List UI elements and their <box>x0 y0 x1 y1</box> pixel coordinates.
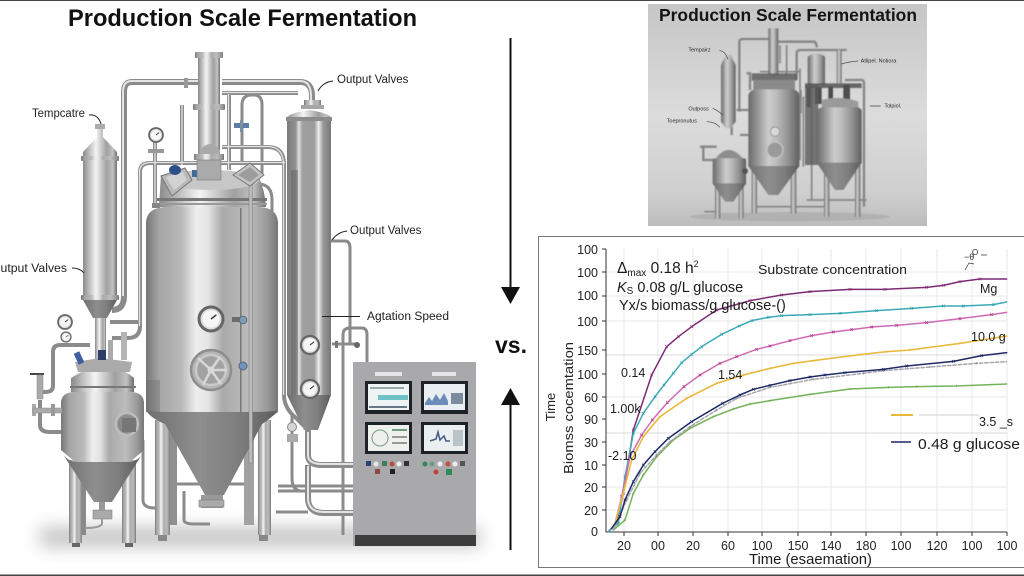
mini labels: Toepronutus <box>667 118 697 124</box>
x axis numbers <box>617 539 1017 553</box>
y axis numbers: 100 <box>577 243 598 257</box>
x axis numbers: 100 <box>891 539 911 553</box>
legend: yellow series: 3.5 _s <box>979 415 1013 429</box>
control buttons <box>366 461 465 475</box>
curve value labels: 1.00k <box>610 402 641 416</box>
mini leader lines <box>707 51 881 127</box>
curve value labels <box>608 282 1006 463</box>
small side fermenter <box>61 332 144 547</box>
axis titles: Time <box>543 393 558 421</box>
label: Agitation Speed: Agtation Speed <box>367 311 449 323</box>
axis titles: Time (esaemation) <box>749 552 872 568</box>
x axis numbers: 100 <box>962 539 982 553</box>
screen 4 <box>421 422 468 454</box>
mini main tank <box>748 80 799 213</box>
axis titles <box>543 342 872 568</box>
arrow: pointing down <box>501 38 520 304</box>
legend: navy series: 0.48 g glucose <box>918 436 1020 453</box>
mini center column <box>768 28 778 75</box>
mini labels: Outposs <box>688 106 709 112</box>
right column gauges <box>301 336 319 398</box>
y axis numbers: 20 <box>584 481 598 495</box>
y axis numbers <box>577 243 598 539</box>
kinetic parameters text: 0.18 h <box>646 260 694 277</box>
mini valve cluster between tanks <box>752 73 862 107</box>
pipework <box>40 81 367 535</box>
blue valves on main tank <box>232 120 249 370</box>
side gauges and valves on small fermenter <box>30 315 360 442</box>
axes and ticks <box>602 249 1007 536</box>
label: Output Valves, top <box>318 74 409 91</box>
mini left column <box>721 55 736 128</box>
screen 2 <box>421 381 468 414</box>
y axis numbers: 100 <box>577 289 598 303</box>
x axis numbers: 100 <box>752 539 772 553</box>
arrow: pointing up <box>501 388 520 550</box>
manhole wheel on main tank <box>191 350 231 390</box>
panel: biomass growth chart <box>538 236 1024 568</box>
label: Output Valves, middle: Output Valves <box>350 225 422 237</box>
x axis numbers: 150 <box>788 539 808 553</box>
curve: purple <box>608 279 1007 532</box>
kinetic parameters text: K <box>617 280 628 296</box>
x axis numbers: 20 <box>686 539 700 553</box>
kinetic parameters text: 0.08 g/L glucose <box>633 280 743 296</box>
kinetic parameters text: 2 <box>694 259 699 269</box>
x axis numbers: 20 <box>617 539 631 553</box>
x axis numbers: 00 <box>651 539 665 553</box>
kinetic parameters text: max <box>627 268 646 279</box>
mini right tank <box>805 85 862 217</box>
curve: gray dashed <box>613 362 1007 530</box>
label: Tempcatre <box>32 108 101 124</box>
label: Output Valves, top: Output Valves <box>337 74 409 86</box>
top hatches and blue actuators <box>161 160 264 196</box>
curve: green <box>613 384 1007 530</box>
y axis numbers: 100 <box>577 315 598 329</box>
kinetic parameters text: Yx/s biomass/g glucose-() <box>619 298 786 314</box>
curve value labels: 10.0 g <box>971 330 1006 344</box>
y axis numbers: 20 <box>584 504 598 518</box>
heading: substrate concentration: Substrate concentration <box>758 262 907 277</box>
x axis numbers: 120 <box>927 539 947 553</box>
x axis numbers: 140 <box>821 539 841 553</box>
x axis numbers: 60 <box>721 539 735 553</box>
y axis numbers: 60 <box>584 391 598 405</box>
curve value labels: -2.10 <box>608 449 637 463</box>
screen 3 <box>365 422 412 454</box>
main fermenter tank <box>146 170 278 541</box>
kinetic parameters text: S <box>627 286 634 297</box>
x axis numbers: 180 <box>856 539 876 553</box>
control panel <box>353 362 476 546</box>
molecule glyph: −θ <box>964 252 974 262</box>
y axis numbers: 100 <box>577 368 598 382</box>
right column vessel <box>286 100 332 430</box>
floor shadow <box>40 528 480 546</box>
kinetic parameters text <box>617 259 786 314</box>
mini equipment illustration <box>667 28 902 221</box>
curve value labels: 0.14 <box>621 366 645 380</box>
pressure gauge on main tank <box>199 307 223 331</box>
mini pipes <box>700 33 867 212</box>
center column <box>184 52 225 184</box>
axis titles: Biomss cocemtation <box>561 342 576 474</box>
panel: production scale fermenter equipment <box>30 52 476 547</box>
label: Tempcatre: Tempcatre <box>32 108 85 120</box>
title: Production Scale Fermentation: Production Scale Fermentation <box>68 5 417 32</box>
plot grid <box>606 249 1007 532</box>
mini labels <box>667 48 902 124</box>
y axis numbers: 100 <box>577 266 598 280</box>
growth curves <box>608 279 1007 532</box>
curve: teal <box>608 302 1007 532</box>
curve: yellow <box>613 336 1007 530</box>
mini small tank <box>713 150 748 218</box>
label: Agitation Speed <box>322 311 449 323</box>
mini rear vessel <box>808 53 825 85</box>
mini labels: Tolpiol. <box>884 104 902 110</box>
x axis numbers: 100 <box>997 539 1017 553</box>
panel: lab scale reference image <box>648 4 927 226</box>
gauge on top pipe <box>148 128 164 208</box>
curve value labels: Mg <box>980 282 997 296</box>
mini title: Production Scale Fermentation <box>659 5 917 25</box>
curve: navy <box>612 353 1007 528</box>
y axis numbers: 150 <box>577 344 598 358</box>
screen 1 <box>365 381 412 414</box>
left column vessel <box>81 124 119 362</box>
y axis numbers: 10 <box>584 459 598 473</box>
y axis numbers: 90 <box>584 413 598 427</box>
y axis numbers: 30 <box>584 436 598 450</box>
vs. label: vs. <box>495 332 527 358</box>
mini labels: Tempairz <box>688 48 711 54</box>
y axis numbers: 0 <box>591 525 598 539</box>
legend: yellow series <box>891 415 1013 429</box>
molecule glyph: O <box>972 248 978 257</box>
curve value labels: 1.54 <box>718 368 742 382</box>
curve: pink <box>613 312 1007 530</box>
mini labels: Atlipel. Notiora <box>861 58 897 64</box>
kinetic parameters text: Δ <box>617 260 627 277</box>
label: Output Valves, middle <box>332 225 422 240</box>
molecule glyph <box>964 248 987 270</box>
